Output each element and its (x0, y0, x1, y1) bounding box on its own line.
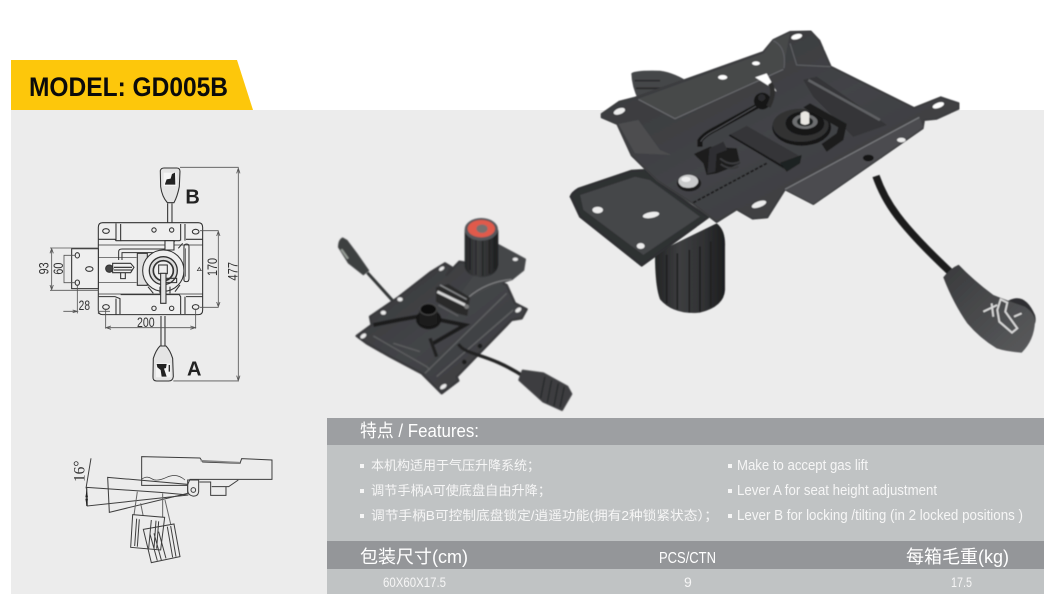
right lever (458, 344, 571, 410)
table values: 60X60X17.5 (383, 574, 446, 590)
features body (327, 445, 1044, 541)
table values (383, 574, 972, 590)
dimension numbers: 477 (224, 262, 240, 281)
right recess (803, 77, 887, 137)
chinese feature list: 调节手柄B可控制底盘锁定/逍遥功能(拥有2种锁紧状态）； (371, 508, 718, 524)
main plate (602, 31, 959, 222)
label B: B (185, 187, 200, 209)
table value band (327, 569, 1044, 594)
plate holes (359, 258, 522, 390)
lever B handle (160, 168, 180, 223)
upper arm with cylinder mount (463, 245, 525, 297)
gas lift cylinder (655, 223, 725, 313)
tilt bracket (436, 284, 470, 316)
rotary disc with shaft (772, 109, 831, 146)
dark linkage rod (700, 100, 768, 147)
plate holes (613, 33, 945, 210)
label A: A (187, 359, 201, 381)
gas lift socket (416, 304, 441, 329)
right bracket (803, 103, 847, 152)
chinese feature list: 本机构适用于气压升降系统； (371, 458, 540, 474)
dimension numbers: 200 (137, 314, 155, 330)
right lever (876, 176, 1036, 353)
dimension numbers: 93 (35, 262, 51, 274)
left lever (338, 237, 402, 311)
english feature list: Lever B for locking /tilting (in 2 locked positions ) (737, 508, 1023, 524)
knurled cylinder with red cap (465, 218, 498, 277)
table headers: PCS/CTN (659, 550, 716, 567)
table values: 9 (684, 574, 692, 590)
table values: 17.5 (951, 574, 972, 590)
lever A handle (153, 316, 173, 381)
handle pictogram (983, 299, 1022, 333)
grey background panel (11, 110, 1044, 594)
base plate (357, 262, 527, 393)
left sloped wall (618, 120, 672, 155)
angle label: 16° (72, 461, 89, 482)
plate details (373, 293, 513, 377)
dimension numbers: 170 (204, 258, 220, 276)
model title tab (11, 60, 253, 110)
english feature list: Lever A for seat height adjustment (737, 483, 937, 499)
table header band (327, 541, 1044, 569)
features panel (327, 418, 1044, 541)
raised rear rail (638, 33, 790, 119)
left arm of plate (72, 249, 98, 289)
dimension numbers: 60 (50, 262, 66, 275)
mounting plate (98, 223, 203, 315)
table headers: 每箱毛重(kg) (906, 547, 1009, 567)
white cut-out (755, 73, 777, 92)
dimension lines (50, 167, 240, 381)
tilted plates (108, 477, 188, 512)
raised front rail (785, 117, 923, 204)
central block (729, 126, 802, 172)
chinese feature list: 调节手柄A可使底盘自由升降； (371, 483, 551, 499)
rivet (677, 175, 701, 191)
product photo: large mechanism, top side (571, 31, 1036, 353)
central mechanism (99, 241, 201, 303)
lever handles (131, 515, 165, 550)
lower-left mounting arm (571, 170, 708, 266)
technical drawing: top view with dimensions (35, 167, 240, 381)
pivot (188, 480, 199, 496)
english feature list (728, 458, 1023, 524)
features header band (327, 418, 1044, 445)
packaging table (327, 541, 1044, 594)
dimension numbers: 28 (79, 297, 90, 313)
model title tab: MODEL: GD005B (29, 72, 228, 102)
dimension numbers (35, 258, 240, 330)
technical drawing: side tilt view 16 degrees (72, 457, 272, 563)
linkage head (754, 83, 773, 109)
product photo: small mechanism, underside (338, 218, 571, 410)
rear lever paddle (631, 71, 691, 100)
stamped marks (693, 163, 767, 203)
table headers (360, 547, 1009, 567)
angle marker (86, 458, 91, 506)
features heading: 特点 / Features: (360, 421, 479, 441)
chinese feature list (360, 458, 718, 524)
housing (142, 457, 272, 485)
left clip (694, 142, 740, 175)
english feature list: Make to accept gas lift (737, 458, 868, 474)
table headers: 包装尺寸(cm) (360, 547, 468, 567)
stems (134, 492, 171, 524)
